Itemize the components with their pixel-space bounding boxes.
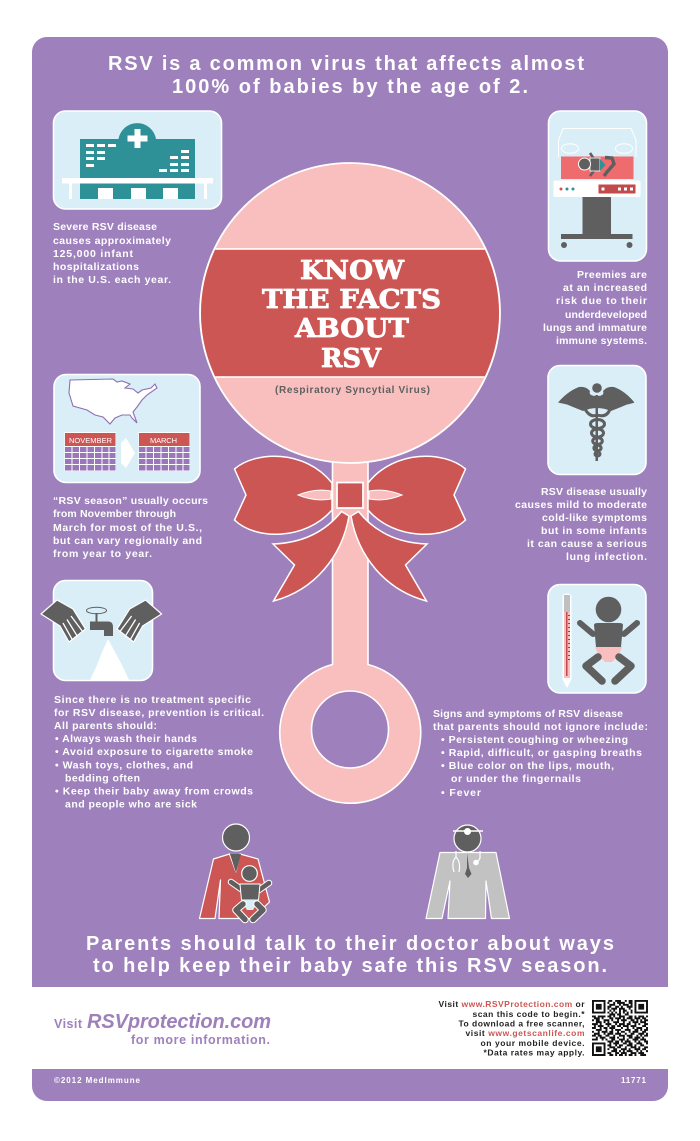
calendar: November	[64, 432, 116, 471]
text: preemies: immune systems.	[556, 335, 647, 347]
panel: incubator	[548, 111, 646, 261]
bow left tail	[273, 512, 349, 601]
scan instructions: visit www.getscanlife.com	[466, 1028, 585, 1038]
icon: right hand	[117, 600, 162, 642]
parent shirt	[230, 854, 241, 873]
washing card	[54, 580, 152, 680]
text: prevention: and people who are sick	[65, 798, 197, 810]
rattle title: RSV	[321, 343, 381, 374]
incubator tray	[561, 156, 634, 179]
text: prevention: bedding often	[65, 772, 140, 784]
icon: hospital building	[62, 123, 213, 199]
calendar: March: MARCH	[150, 436, 177, 445]
panel: RSV season	[54, 374, 200, 482]
closing message: to help keep their baby safe this RSV season.	[93, 955, 607, 977]
panel: symptoms baby	[548, 584, 646, 693]
text: preemies	[543, 269, 647, 347]
rattle title: THE FACTS	[262, 284, 441, 315]
text: mild symptoms: RSV disease usually	[541, 486, 647, 498]
scan instructions: scan this code to begin.*	[472, 1009, 585, 1019]
text: mild symptoms: causes mild to moderate	[515, 499, 647, 511]
red band on rattle head	[190, 249, 510, 377]
headline: 100% of babies by the age of 2.	[172, 76, 528, 98]
text: hospitalizations: 125,000 infant	[53, 248, 134, 260]
text: mild symptoms: cold-like symptoms	[542, 512, 647, 524]
incubator card	[548, 111, 646, 261]
icon: baby in incubator	[578, 153, 614, 176]
text: RSV season: March for most of the U.S.,	[53, 522, 202, 534]
icon: baby	[580, 597, 637, 681]
scan instructions: Visit www.RSVProtection.com or	[438, 999, 585, 1009]
website call to action	[54, 1011, 271, 1047]
bow left loop	[234, 456, 332, 534]
calendar: March	[138, 432, 190, 471]
text: mild symptoms: it can cause a serious	[527, 538, 647, 550]
text: signs and symptoms: that parents should not ignore include:	[433, 721, 648, 733]
headline	[108, 53, 584, 98]
text: RSV season	[53, 495, 208, 560]
document number: 11771	[621, 1076, 647, 1085]
baby in arms	[231, 866, 269, 920]
text: signs and symptoms: Signs and symptoms of RSV disease	[433, 708, 623, 720]
rattle title: KNOW	[300, 255, 405, 286]
doctor coat	[426, 852, 510, 918]
text: RSV season: but can vary regionally and	[53, 535, 202, 547]
text: mild symptoms: lung infection.	[566, 551, 647, 563]
icon: US map	[69, 379, 157, 424]
scan instructions: on your mobile device.	[480, 1038, 584, 1048]
parent head	[222, 824, 250, 851]
text: preemies: at an increased	[563, 282, 647, 294]
stethoscope	[453, 851, 480, 872]
text: signs and symptoms: • Persistent coughing or wheezing	[441, 734, 628, 746]
rattle title: ABOUT	[294, 313, 409, 344]
text: preemies: lungs and immature	[543, 322, 647, 334]
text: signs and symptoms: • Fever	[441, 787, 481, 799]
panel: caduceus	[548, 366, 646, 474]
website call to action: RSVprotection.com	[87, 1011, 271, 1033]
rattle handle and ring	[280, 440, 421, 803]
text: RSV season: “RSV season” usually occurs	[53, 495, 208, 507]
doctor tie	[465, 853, 472, 878]
icon: left hand	[41, 600, 86, 642]
text: prevention: • Always wash their hands	[55, 733, 197, 745]
text: preemies: underdeveloped	[565, 309, 647, 321]
text: prevention: All parents should:	[54, 720, 157, 732]
rattle subtitle: (Respiratory Syncytial Virus)	[275, 385, 430, 396]
scan instructions: To download a free scanner,	[458, 1018, 584, 1028]
icon: incubator hood	[558, 128, 636, 157]
text: prevention	[54, 694, 264, 810]
incubator wheels	[561, 242, 632, 248]
doctor head	[454, 825, 481, 852]
text: hospitalizations: in the U.S. each year.	[53, 274, 171, 286]
text: hospitalizations: Severe RSV disease	[53, 221, 157, 233]
website call to action: Visit	[54, 1017, 83, 1031]
text: prevention: • Avoid exposure to cigarette smoke	[55, 746, 253, 758]
text: signs and symptoms: • Rapid, difficult, or gasping breaths	[441, 747, 642, 759]
ring hole	[312, 691, 388, 768]
text: preemies: risk due to their	[556, 295, 647, 307]
text: prevention: • Wash toys, clothes, and	[55, 760, 193, 772]
scan instructions: *Data rates may apply.	[484, 1048, 584, 1058]
month arrow	[121, 438, 135, 468]
copyright: ©2012 MedImmune	[54, 1076, 141, 1085]
bow knot	[337, 482, 363, 508]
closing message: Parents should talk to their doctor about ways	[86, 933, 614, 955]
text: prevention: Since there is no treatment specific	[54, 694, 251, 706]
text: signs and symptoms: or under the fingernails	[451, 773, 581, 785]
closing message	[86, 933, 614, 977]
calendar: November: NOVEMBER	[69, 436, 113, 445]
rattle illustration	[190, 163, 510, 803]
icon: doctor	[426, 825, 510, 918]
rattle head	[200, 163, 500, 463]
scan instructions	[438, 999, 585, 1058]
hospital card	[54, 111, 222, 209]
icon: water stream	[90, 639, 129, 680]
white footer strip	[32, 987, 668, 1069]
text: prevention: for RSV disease, prevention is critical.	[54, 707, 264, 719]
icon: parent holding baby	[200, 824, 270, 920]
text: hospitalizations	[53, 221, 171, 286]
incubator control panel	[554, 180, 640, 197]
bow right tail	[351, 512, 427, 601]
text: signs and symptoms	[433, 708, 648, 799]
bow right highlight	[369, 490, 402, 500]
icon: thermometer	[563, 594, 571, 687]
text: hospitalizations: hospitalizations	[53, 261, 139, 273]
text: mild symptoms	[515, 486, 647, 563]
text: signs and symptoms: • Blue color on the lips, mouth,	[441, 760, 614, 772]
incubator stand	[561, 197, 632, 239]
QR code	[592, 1000, 648, 1056]
panel: hospital	[54, 111, 222, 209]
bow right loop	[368, 456, 466, 534]
parent jacket	[200, 854, 270, 918]
text: prevention: • Keep their baby away from crowds	[55, 786, 253, 798]
season card	[54, 374, 200, 482]
head mirror	[453, 830, 483, 832]
bow left highlight	[298, 490, 331, 500]
text: RSV season: from year to year.	[53, 548, 152, 560]
text: mild symptoms: but in some infants	[541, 525, 647, 537]
text: RSV season: from November through	[53, 508, 176, 520]
icon: faucet	[86, 607, 113, 636]
text: hospitalizations: causes approximately	[53, 235, 171, 247]
website call to action: for more information.	[131, 1033, 270, 1047]
rattle title	[262, 255, 441, 374]
bow	[234, 456, 466, 601]
panel: hand washing	[41, 580, 162, 680]
caduceus card	[548, 366, 646, 474]
baby card	[548, 584, 646, 693]
text: preemies: Preemies are	[577, 269, 647, 281]
headline: RSV is a common virus that affects almost	[108, 53, 584, 75]
icon: caduceus	[558, 383, 634, 461]
